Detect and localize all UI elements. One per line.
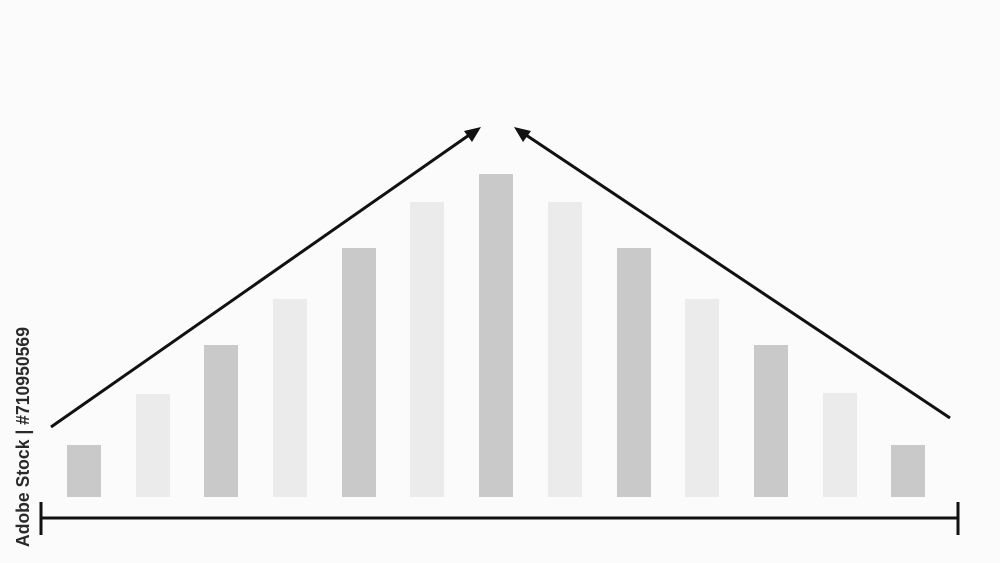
arrow: left rising: [51, 127, 481, 427]
axis: base line with end ticks: [41, 502, 958, 535]
bars: [67, 174, 925, 497]
arrow: right rising: [514, 127, 950, 418]
watermark text: stock id: Adobe Stock | #710950569: [13, 327, 33, 547]
